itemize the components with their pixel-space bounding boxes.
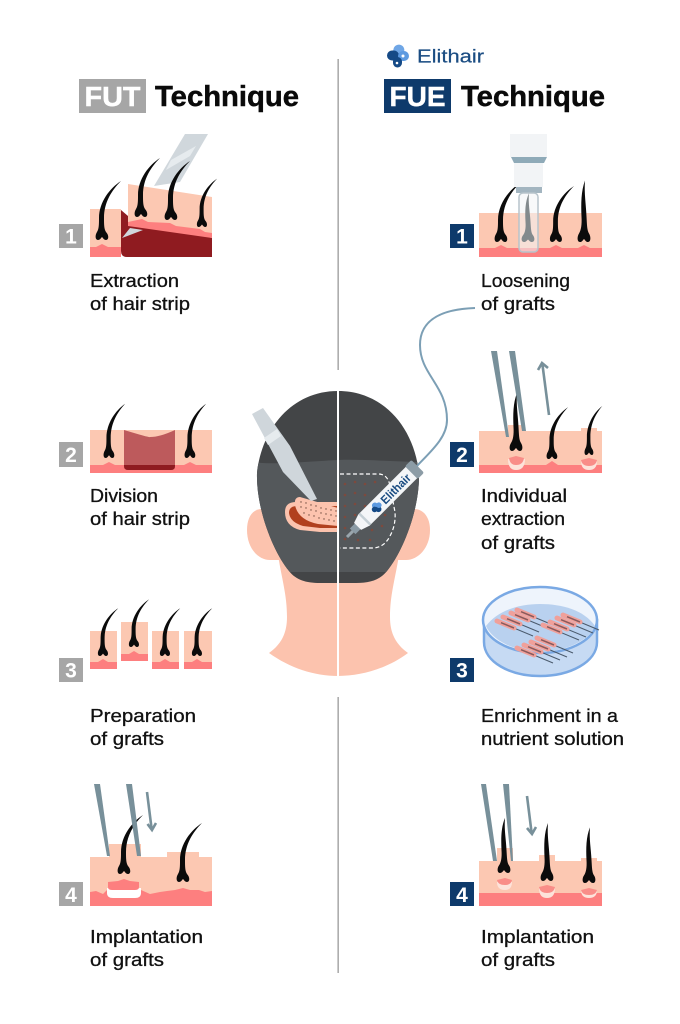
logo: Elithair <box>387 44 484 68</box>
neck <box>269 555 408 676</box>
tube cable <box>417 308 475 466</box>
FUE pen <box>341 460 424 543</box>
FUE heading word: Technique <box>461 81 605 113</box>
number badge 2 <box>450 442 474 467</box>
step label <box>481 927 594 970</box>
arrow: down <box>147 792 156 830</box>
illustration: graft blocks <box>90 599 212 669</box>
number badge 2 <box>59 442 83 467</box>
panel: FUE step 1 <box>450 134 602 314</box>
number badge 1: 1 <box>456 226 468 248</box>
number badge 4: 4 <box>65 884 77 907</box>
center divider line upper <box>338 59 339 370</box>
step label: Implantation <box>90 927 203 947</box>
number badge 2: 2 <box>456 444 468 467</box>
center divider line lower <box>338 697 339 973</box>
center white divider <box>337 391 339 676</box>
number badge 1 <box>450 224 474 248</box>
number badge 3: 3 <box>456 660 468 682</box>
step label <box>90 927 203 970</box>
FUT heading word: Technique <box>155 81 299 113</box>
step label: Preparation <box>90 706 196 726</box>
panel: FUT step 2 <box>59 404 212 529</box>
pen logo <box>369 499 385 515</box>
arrow: up <box>538 363 549 415</box>
step label: of grafts <box>481 950 555 970</box>
FUT badge: FUT <box>84 81 140 112</box>
step label <box>90 486 190 529</box>
illustration: strip division <box>90 404 212 473</box>
step label: of hair strip <box>90 294 190 314</box>
heading: FUT Technique <box>79 79 299 113</box>
illustration: FUE implantation <box>479 784 602 906</box>
illustration: punch tool loosening <box>479 134 602 257</box>
illustration: FUT implantation <box>90 784 212 906</box>
illustration: individual extraction <box>479 351 602 473</box>
step label: Individual <box>481 486 567 506</box>
step label: of grafts <box>90 729 164 749</box>
step label: Division <box>90 486 158 506</box>
hair <box>256 391 419 583</box>
illustration: petri dish with grafts <box>483 587 599 676</box>
number badge 1 <box>59 224 83 248</box>
step label: of grafts <box>481 533 555 553</box>
number badge 3 <box>450 658 474 682</box>
step label: of grafts <box>481 294 555 314</box>
number badge 2: 2 <box>65 444 77 467</box>
ears <box>247 509 430 560</box>
step label: Extraction <box>90 271 179 291</box>
number badge 4: 4 <box>456 884 468 907</box>
panel: FUT step 3 <box>59 599 212 749</box>
step label: of grafts <box>90 950 164 970</box>
illustration: strip extraction <box>90 134 217 257</box>
number badge 4 <box>59 882 83 907</box>
step label <box>90 271 190 314</box>
illustration: head from behind <box>247 308 475 676</box>
step label <box>481 706 624 749</box>
panel: FUT step 4 <box>59 784 212 970</box>
step label: Loosening <box>481 271 570 291</box>
scalpel <box>252 408 317 501</box>
pen wordmark: Elithair <box>378 471 414 507</box>
step label: of hair strip <box>90 509 190 529</box>
step label: Enrichment in a <box>481 706 619 726</box>
step label <box>90 706 196 749</box>
FUT strip wound <box>285 497 338 532</box>
panel: FUE step 4 <box>450 784 602 970</box>
number badge 1: 1 <box>65 226 77 248</box>
arrow: down <box>527 796 536 834</box>
number badge 3 <box>59 658 83 682</box>
number badge 3: 3 <box>65 660 77 682</box>
FUE badge: FUE <box>390 81 446 112</box>
panel: FUE step 2 <box>450 351 602 553</box>
logo icon <box>387 44 409 68</box>
panel: FUT step 1 <box>59 134 217 314</box>
step label <box>481 271 570 314</box>
panel: FUE step 3 <box>450 587 624 749</box>
step label: Implantation <box>481 927 594 947</box>
step label: extraction <box>481 509 565 529</box>
number badge 4 <box>450 882 474 907</box>
FUE dotted donor area <box>340 474 395 548</box>
step label <box>481 486 567 553</box>
logo wordmark: Elithair <box>417 46 484 66</box>
step label: nutrient solution <box>481 729 624 749</box>
heading: FUE Technique <box>384 79 605 113</box>
